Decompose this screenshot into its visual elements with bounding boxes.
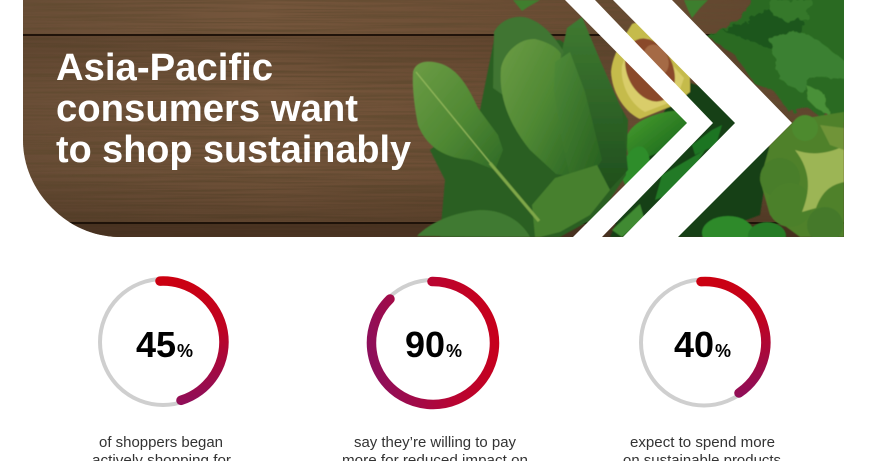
hero title (56, 47, 411, 171)
caption: say they’re willing to pay (354, 435, 517, 451)
ring chart 90% (370, 280, 496, 406)
parsley (706, 0, 850, 125)
dark base foliage (430, 40, 628, 237)
spinach leaves (413, 0, 628, 237)
ring chart 45% (100, 279, 226, 405)
hero title: consumers want (56, 88, 358, 130)
dark greens behind peppers (610, 80, 770, 237)
broccoli (760, 112, 844, 243)
value 45%: 45% (136, 324, 193, 365)
caption: expect to spend more (630, 435, 775, 451)
hero title: to shop sustainably (56, 129, 411, 171)
white double chevron arrow (565, 0, 792, 237)
hero title: Asia-Pacific (56, 47, 273, 89)
caption (623, 435, 781, 461)
stat: 45 percent (92, 279, 231, 461)
stat: 90 percent (342, 280, 528, 461)
leaf stem (416, 72, 492, 165)
value 90%: 90% (405, 324, 462, 365)
value 40%: 40% (674, 324, 731, 365)
green bell peppers (612, 111, 722, 237)
caption (342, 435, 528, 461)
lower leaf cluster (532, 165, 610, 237)
right centre leaf (554, 52, 602, 177)
big centre leaf (501, 39, 570, 176)
bottom green peppers (701, 215, 786, 237)
caption (92, 435, 231, 461)
bottom left leaf (417, 210, 530, 237)
large left leaf (413, 62, 503, 170)
top sprig (684, 0, 708, 18)
back dark leaves (560, 17, 628, 200)
caption: of shoppers began (99, 435, 223, 451)
ring chart 40% (641, 280, 767, 406)
vegetables photo illustration (413, 0, 850, 250)
top small leaf (513, 0, 540, 11)
wood table background (23, 0, 844, 237)
hero banner panel (23, 0, 850, 250)
stat: 40 percent (623, 280, 781, 461)
avocado half (611, 23, 690, 119)
